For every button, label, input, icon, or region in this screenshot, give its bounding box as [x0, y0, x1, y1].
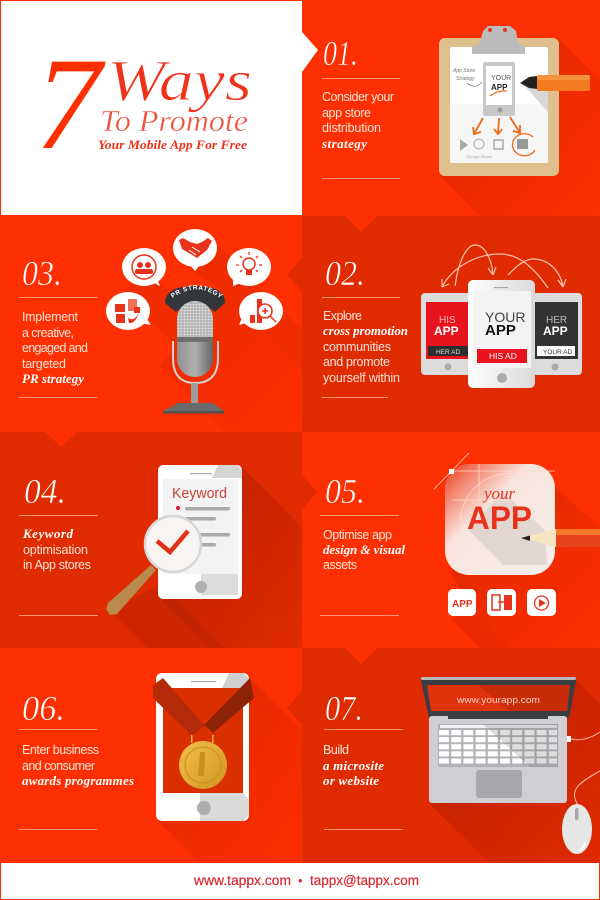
- text block 03: engaged and: [22, 341, 88, 355]
- icon: clipboard: Try App Stores: [466, 154, 492, 159]
- panel: 05 design assets: [302, 453, 600, 648]
- footer: [1, 863, 599, 899]
- ribbon: [153, 678, 254, 736]
- text block 06: and consumer: [22, 759, 95, 773]
- number 05: 05.: [325, 472, 365, 511]
- PR strategy label: PR STRATEGY: [170, 285, 223, 298]
- app icon word APP: APP: [467, 500, 532, 536]
- icon: clipboard: [439, 26, 590, 176]
- footer email: tappx@tappx.com: [310, 873, 419, 888]
- panel: 07 microsite: [302, 648, 600, 863]
- text block 07: or website: [323, 773, 379, 788]
- footer separator: •: [298, 873, 303, 888]
- phone: your app: YOUR: [485, 309, 525, 325]
- panel: 03 PR strategy: [19, 229, 302, 414]
- text block 06: awards programmes: [22, 773, 134, 788]
- icon: clipboard: APP: [491, 83, 508, 92]
- phone: his app: [421, 293, 473, 375]
- number 03: 03.: [22, 254, 62, 293]
- footer website: www.tappx.com: [193, 873, 291, 888]
- text block 07: a microsite: [323, 758, 384, 773]
- phone: keyword: Keyword: [172, 485, 227, 502]
- phone: her app: APP: [543, 324, 568, 338]
- text block 03: a creative,: [22, 326, 74, 340]
- icon: clipboard: YOUR: [491, 75, 511, 82]
- text block 04: optimisation: [23, 543, 88, 557]
- text block 02: communities: [323, 340, 391, 354]
- number 07: 07.: [325, 689, 363, 728]
- number 06: 06.: [22, 689, 65, 728]
- phone: his app: HER AD: [436, 349, 461, 356]
- icon: speech bubble analytics: [239, 292, 283, 330]
- text block 04: in App stores: [23, 558, 91, 572]
- text block 02: Explore: [323, 309, 362, 323]
- phone: your app: [468, 280, 535, 388]
- text block 01: strategy: [321, 136, 367, 151]
- number 01: 01.: [323, 34, 358, 73]
- icon: microphone: [163, 285, 225, 414]
- text block 01: Consider your: [322, 90, 394, 104]
- title numeral 7: 7: [35, 30, 106, 177]
- icon: clipboard: Strategy: [456, 76, 475, 82]
- text block 02: yourself within: [323, 371, 400, 385]
- panel: header title: [1, 1, 318, 215]
- panel: 01 app store strategy: [321, 26, 600, 216]
- phone: your app: HIS AD: [489, 351, 517, 361]
- text block 03: PR strategy: [22, 371, 84, 386]
- phone: his app: APP: [434, 324, 459, 338]
- icon: small app tile: [448, 589, 476, 616]
- cables: [571, 732, 600, 805]
- icon: small app tile: APP: [452, 599, 473, 610]
- text block 04: Keyword: [22, 526, 74, 541]
- subtitle: Your Mobile App For Free: [98, 137, 247, 152]
- app icon script word: your: [482, 484, 516, 503]
- icon: clipboard: App Store: [452, 68, 475, 74]
- phone: your app: APP: [485, 322, 516, 339]
- icon: small play tile: [527, 589, 556, 616]
- text block 05: assets: [323, 558, 357, 572]
- text block 06: Enter business: [22, 743, 99, 757]
- panel: 06 awards: [19, 673, 302, 863]
- text block 07: Build: [323, 743, 349, 757]
- phone: his app: HIS: [439, 315, 456, 326]
- text block 05: Optimise app: [323, 528, 392, 542]
- phone: medal: [153, 673, 254, 821]
- medal: [179, 735, 227, 789]
- number 02: 02.: [325, 254, 365, 293]
- panel: 02 cross promotion: [302, 216, 600, 432]
- title: To Promote: To Promote: [100, 103, 248, 138]
- icon: magnifying glass: [106, 516, 201, 615]
- phone: her app: [532, 293, 582, 375]
- text block 01: app store: [322, 106, 371, 120]
- icon: speech bubble social: [106, 292, 151, 330]
- icon: app icon: [434, 453, 555, 575]
- text block 05: design & visual: [323, 542, 405, 557]
- panel: 04 keyword: [0, 432, 302, 648]
- text block 01: distribution: [322, 121, 381, 135]
- text block 03: targeted: [22, 357, 66, 371]
- phone: her app: YOUR AD: [543, 349, 573, 356]
- icon: pencil: [521, 529, 600, 547]
- number 04: 04.: [24, 472, 66, 511]
- text block 02: cross promotion: [323, 323, 408, 338]
- phone: keyword: [158, 465, 242, 599]
- icon: speech bubble light bulb: [227, 248, 271, 286]
- arrows between phones: [442, 245, 566, 288]
- title: Ways: Ways: [107, 48, 252, 113]
- text block 03: Implement: [22, 310, 79, 324]
- icon: small cross promo tile: [487, 589, 516, 616]
- icon: mouse: [562, 804, 592, 854]
- phone: her app: HER: [546, 315, 567, 326]
- icon: laptop: [421, 677, 576, 803]
- icon: speech bubble people: [122, 248, 166, 286]
- icon: speech bubble handshake: [173, 229, 217, 271]
- text block 02: and promote: [323, 355, 390, 369]
- laptop URL: www.yourapp.com: [456, 695, 540, 706]
